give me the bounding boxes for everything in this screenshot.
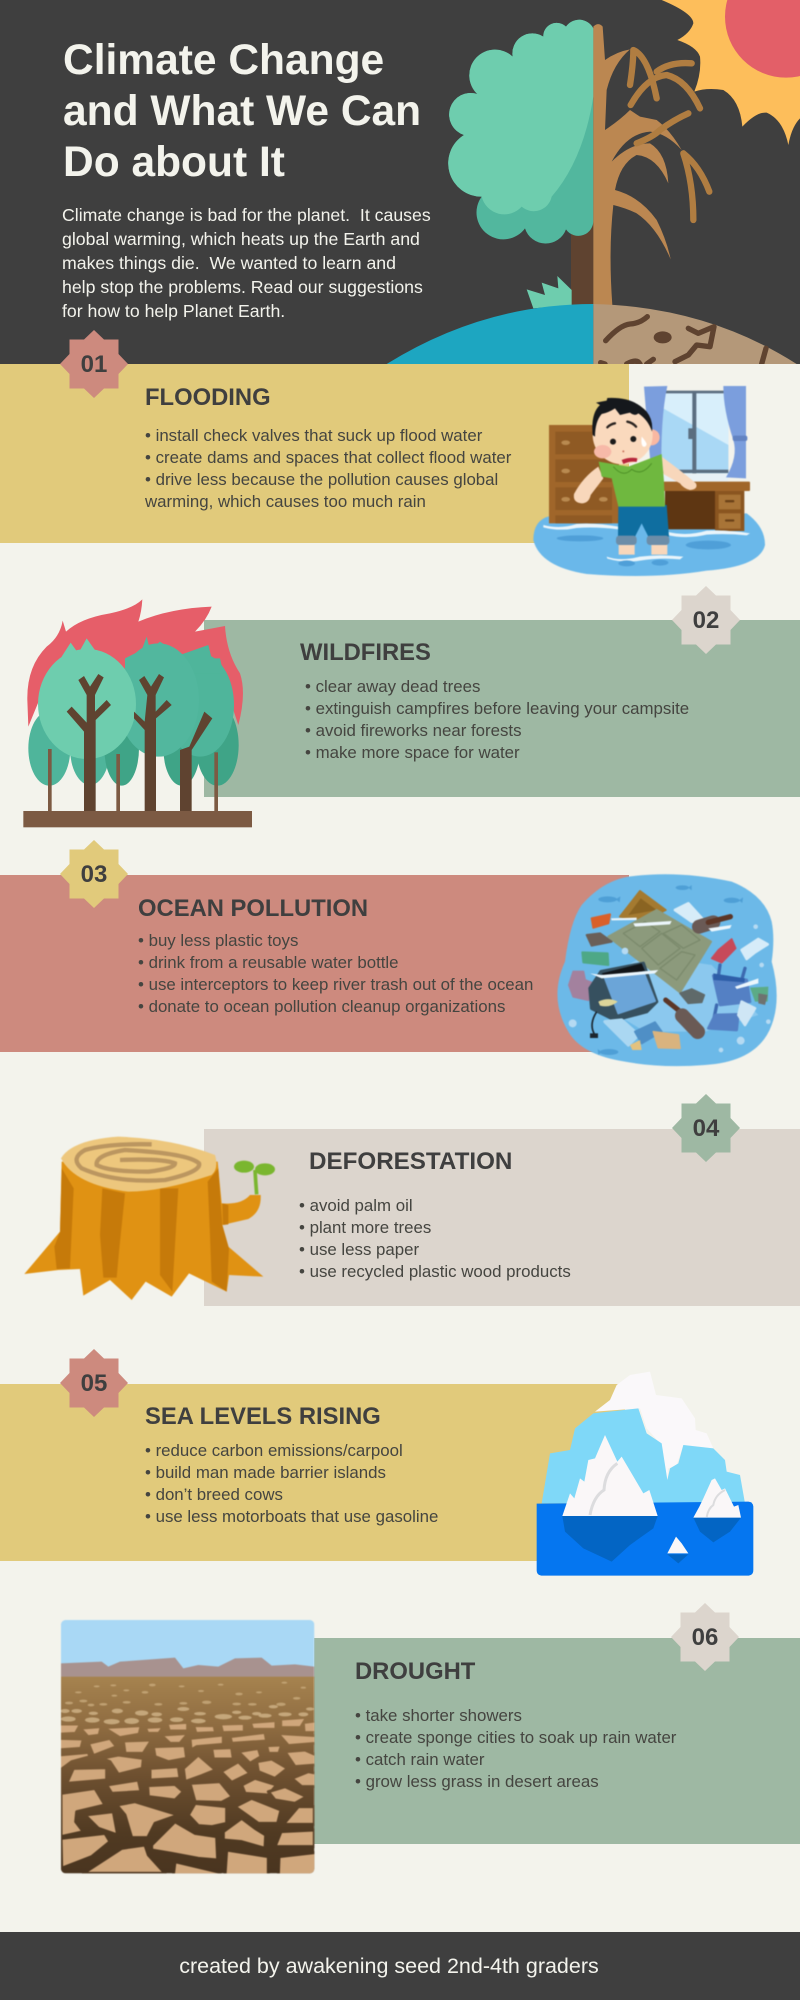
intro text: global warming, which heats up the Earth and (62, 229, 420, 249)
title (63, 37, 421, 186)
intro text: for how to help Planet Earth. (62, 301, 285, 321)
list: wildfire tips: • extinguish campfires before leaving your campsite (305, 699, 689, 718)
badge 04: 04 (693, 1115, 720, 1142)
badge 02: 02 (693, 607, 719, 634)
intro text: help stop the problems. Read our suggestions (62, 277, 423, 297)
list: deforestation tips: • use less paper (299, 1240, 419, 1259)
list: flooding tips: • install check valves that suck up flood water (145, 426, 482, 445)
footer: created by awakening seed 2nd-4th graders (179, 1954, 599, 1978)
list: wildfire tips: • avoid fireworks near forests (305, 721, 522, 740)
illustration: iceberg in the sea (536, 1372, 754, 1576)
illustration: boy standing in flooded room (532, 385, 766, 577)
badge 06: 06 (692, 1624, 718, 1651)
list: drought tips: • take shorter showers (355, 1706, 522, 1725)
list: ocean tips: • drink from a reusable water bottle (138, 953, 399, 972)
list: sea level tips: • build man made barrier islands (145, 1463, 386, 1482)
panel: sea levels rising (0, 1384, 625, 1561)
list: deforestation tips: • avoid palm oil (299, 1196, 413, 1215)
heading: deforestation: DEFORESTATION (309, 1148, 512, 1175)
list: ocean tips: • donate to ocean pollution cleanup organizations (138, 997, 505, 1016)
heading: ocean pollution: OCEAN POLLUTION (138, 895, 368, 922)
list: deforestation tips (299, 1196, 571, 1281)
badge 02 (672, 586, 740, 654)
list: flooding tips: • create dams and spaces that collect flood water (145, 448, 511, 467)
list: sea level tips (145, 1441, 438, 1526)
title: Climate Change (63, 37, 384, 84)
badge 04 (672, 1094, 740, 1162)
heading: sea levels rising: SEA LEVELS RISING (145, 1403, 381, 1430)
intro text (62, 205, 431, 321)
heading: flooding: FLOODING (145, 384, 271, 411)
badge 05: 05 (81, 1370, 107, 1397)
list: sea level tips: • reduce carbon emissions/carpool (145, 1441, 403, 1460)
list: sea level tips: • don’t breed cows (145, 1485, 283, 1504)
list: ocean tips: • use interceptors to keep river trash out of the ocean (138, 975, 533, 994)
list: flooding tips: warming, which causes too much rain (145, 492, 426, 511)
list: ocean tips (138, 931, 533, 1016)
badge 01: 01 (81, 351, 107, 378)
panel: drought (314, 1638, 800, 1844)
list: drought tips: • create sponge cities to soak up rain water (355, 1728, 676, 1747)
intro text: makes things die. We wanted to learn and (62, 253, 396, 273)
title: and What We Can (63, 88, 421, 135)
intro text: Climate change is bad for the planet. It causes (62, 205, 431, 225)
list: drought tips: • catch rain water (355, 1750, 484, 1769)
list: wildfire tips: • make more space for water (305, 743, 520, 762)
list: wildfire tips: • clear away dead trees (305, 677, 480, 696)
list: flooding tips: • drive less because the pollution causes global (145, 470, 498, 489)
illustration: half living half dead tree with sun (386, 0, 800, 364)
list: deforestation tips: • use recycled plastic wood products (299, 1262, 571, 1281)
heading: drought: DROUGHT (355, 1658, 475, 1685)
list: ocean tips: • buy less plastic toys (138, 931, 298, 950)
list: drought tips (355, 1706, 676, 1791)
illustration: cracked dry earth (60, 1620, 316, 1874)
illustration: tree stump with sprout (24, 1136, 276, 1300)
panel: wildfires (204, 620, 800, 797)
badge 01 (60, 330, 128, 398)
footer (0, 1932, 800, 2000)
list: flooding tips (145, 426, 512, 511)
panel: flooding (0, 364, 629, 543)
list: drought tips: • grow less grass in desert areas (355, 1772, 599, 1791)
badge 03: 03 (81, 861, 107, 888)
badge 06 (671, 1603, 739, 1671)
illustration: trash floating in ocean (556, 874, 778, 1067)
badge 03 (60, 840, 128, 908)
panel: deforestation (204, 1129, 800, 1306)
list: sea level tips: • use less motorboats that use gasoline (145, 1507, 438, 1526)
list: wildfire tips (305, 677, 689, 762)
list: deforestation tips: • plant more trees (299, 1218, 431, 1237)
panel: ocean pollution (0, 875, 629, 1052)
header panel (0, 0, 800, 364)
illustration: burning trees (23, 600, 252, 828)
badge 05 (60, 1349, 128, 1417)
heading: wildfires: WILDFIRES (300, 639, 431, 666)
title: Do about It (63, 139, 285, 186)
